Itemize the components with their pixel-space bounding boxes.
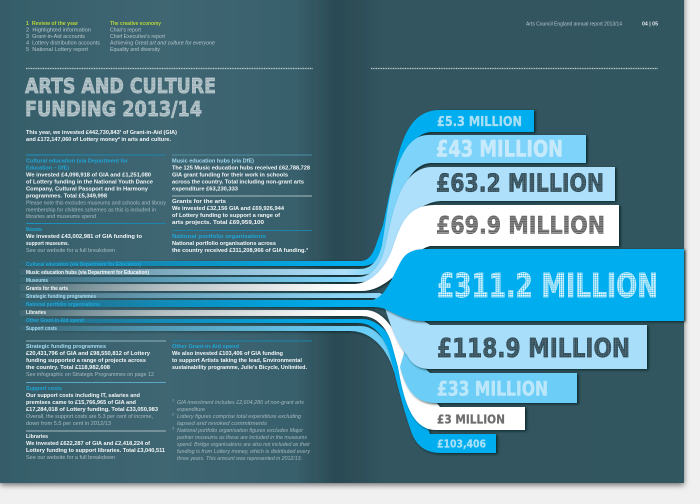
block: music education hubs: Music education hubs (via DfE) (172, 158, 254, 164)
block: support costs: £17,284,018 of Lottery funding. Total £33,050,983 (26, 407, 158, 413)
block: other grant-in-aid spend: We also invested £103,406 of GIA funding (172, 351, 284, 357)
block: cultural education: membership for children schemes as this is included in (26, 208, 156, 214)
ribbon: music education hubs, £63.2 million (20, 167, 615, 282)
navigation: chapter list (110, 21, 215, 53)
block: cultural education: Education – DfE) (26, 166, 69, 172)
ribbon labels: Museums (26, 278, 48, 284)
block: cultural education (26, 154, 166, 220)
block: strategic funding programmes: £20,431,796 of GIA and £98,550,812 of Lottery (26, 351, 151, 357)
navigation: section list: 1 Review of the year (26, 21, 79, 27)
footnotes: funding is from Lottery money, which is distributed every (177, 449, 311, 455)
ribbon: strategic funding, £118.9 million (20, 293, 647, 369)
block: cultural education: of Lottery funding in the National Youth Dance (26, 180, 153, 186)
intro text (26, 129, 177, 143)
block: national portfolio organisations: National portfolio organisations (172, 234, 266, 240)
block: cultural education: Company, Cultural Passport and In Harmony (26, 186, 149, 192)
block: libraries: We invested £622,287 of GIA and £2,418,224 of (26, 441, 150, 447)
ribbon: museums, £43 million: £43 MILLION (436, 138, 563, 162)
footnotes: ² (172, 413, 175, 419)
ribbon: grants for the arts, £69.9 million (20, 205, 619, 291)
footnotes: ³ (172, 427, 175, 433)
block: cultural education: Cultural education (via Department for (26, 158, 129, 164)
ribbon labels: Music education hubs (via Department for Education) (26, 270, 149, 276)
ribbon: support costs, £33 million (400, 350, 577, 403)
block: music education hubs (172, 154, 312, 192)
block: libraries: See our website for a full breakdown (26, 455, 115, 461)
navigation: chapter list: The creative economy (110, 21, 162, 27)
block: grants for the arts: Grants for the arts (172, 199, 226, 205)
block: support costs: Support costs (26, 386, 62, 392)
ribbon: other grant-in-aid, £103,406: £103,406 (437, 438, 486, 450)
footnotes (172, 399, 311, 462)
block: other grant-in-aid spend (172, 340, 312, 371)
navigation: section list: 5 National Lottery report (26, 47, 88, 53)
navigation: section list: 3 Grant-in-Aid accounts (26, 34, 85, 40)
block: grants for the arts (172, 196, 312, 226)
navigation: section list (26, 21, 100, 53)
block: support costs (26, 382, 166, 427)
block: cultural education: Please note this excludes museums and schools and library (26, 200, 166, 206)
block: other grant-in-aid spend: to support Artists taking the lead, Environmental (172, 358, 302, 364)
block: libraries: Lottery funding to support libraries. Total £3,040,511 (26, 448, 165, 454)
block: museums: We invested £43,002,981 of GIA funding to (26, 234, 143, 240)
block: support costs: down from 5.5 per cent in 2012/13 (26, 421, 111, 427)
block: cultural education: We invested £4,098,918 of GIA and £1,251,080 (26, 172, 151, 178)
block: national portfolio organisations: National portfolio organisations across (172, 241, 276, 247)
footnotes: ¹ (172, 399, 174, 405)
block: support costs: premises came to £15,766,965 of GIA and (26, 400, 137, 406)
block: cultural education: programmes. Total £5,349,998 (26, 194, 107, 200)
block: music education hubs: GIA grant funding for their work in schools (172, 172, 288, 178)
block: national portfolio organisations: the country received £311,208,966 of GIA funding.³ (172, 247, 308, 254)
block: strategic funding programmes: Strategic funding programmes (26, 344, 106, 350)
ribbon: music education hubs, £63.2 million: £63.2 MILLION (436, 168, 604, 198)
block: grants for the arts: We invested £32,156 GIA and £69,926,944 (172, 206, 285, 212)
ribbon: strategic funding, £118.9 million: £118.9 MILLION (437, 334, 630, 364)
footnotes: Lottery figures comprise total expenditure excluding (177, 414, 302, 420)
footnotes: three years. This amount was represented in 2012/13. (177, 456, 302, 462)
navigation: chapter list: Chair's report (110, 28, 141, 34)
block: music education hubs: across the country. Total including non-grant arts (172, 180, 304, 186)
block: music education hubs: The 125 Music education hubs received £62,788,728 (172, 166, 310, 172)
block: other grant-in-aid spend: sustainability programme, Julie's Bicycle, Unlimited. (172, 365, 307, 371)
running header: 04 | 05 (642, 22, 658, 28)
ribbon: libraries, £3 million (20, 310, 525, 430)
block: strategic funding programmes: the country. Total £118,982,608 (26, 365, 110, 371)
ribbon labels: Grants for the arts (26, 286, 68, 292)
block: other grant-in-aid spend: Other Grant-in-Aid spend (172, 344, 240, 350)
navigation: chapter list: Chief Executive's report (110, 34, 165, 40)
block: strategic funding programmes (26, 340, 166, 378)
title (25, 74, 216, 121)
footnotes: expenditure (177, 407, 205, 413)
ribbon labels: Other Grant-in-Aid spend (26, 318, 84, 324)
ribbon: cultural education, £5.3 million (20, 110, 534, 266)
block: libraries (26, 430, 166, 461)
title: ARTS AND CULTURE (25, 74, 216, 98)
footnotes: lapsed and revoked commitments (177, 421, 267, 427)
block: strategic funding programmes: See infographic on Strategic Programmes on page 12 (26, 372, 154, 378)
ribbon: other grant-in-aid, £103,406 (20, 319, 496, 453)
intro text: and £172,147,060 of Lottery money² in arts and culture. (26, 136, 171, 143)
block: grants for the arts: of Lottery funding to support a range of (172, 213, 280, 219)
block: support costs: Our support costs including IT, salaries and (26, 393, 140, 399)
navigation: chapter list: Equality and diversity (110, 47, 160, 53)
ribbon labels: Support costs (26, 326, 57, 332)
running header: Arts Council England annual report 2013/14 (526, 22, 622, 28)
footnotes: partner museums as these are included in the museums (176, 435, 307, 441)
ribbon: support costs strip and curve (behind) (20, 326, 400, 372)
footnotes: National portfolio organisation figures excludes Major (177, 428, 304, 434)
footnotes: GIA investment includes £2,604,280 of non-grant arts (177, 400, 304, 406)
block: cultural education: libraries and museums spend (26, 214, 96, 220)
title: FUNDING 2013/14 (25, 97, 202, 121)
ribbon: museums, £43 million (20, 135, 586, 275)
block: national portfolio organisations (172, 230, 312, 254)
navigation: chapter list: Achieving Great art and culture for everyone (110, 40, 215, 46)
ribbon: grants for the arts, £69.9 million: £69.9 MILLION (436, 212, 605, 240)
ribbon: national portfolio organisations, £311.2 million (20, 249, 684, 321)
block: support costs: Overall, the support costs are 5.3 per cent of income, (26, 414, 153, 420)
ribbon labels: Libraries (26, 310, 46, 316)
ribbon labels: Strategic funding programmes (26, 294, 96, 300)
ribbon: support costs, £33 million: £33 MILLION (437, 378, 548, 400)
block: grants for the arts: arts projects. Total £69,959,100 (172, 220, 264, 226)
ribbon labels: National portfolio organisations (26, 302, 100, 308)
ribbon labels: Cultural education (via Department for Education) (26, 262, 141, 268)
navigation: section list: 2 Highlighted information (26, 28, 91, 34)
ribbon: cultural education, £5.3 million: £5.3 MILLION (437, 114, 522, 130)
block: strategic funding programmes: funding supported a range of projects across (26, 358, 146, 364)
footnotes: spend. Bridge organisations are also not included as their (177, 442, 311, 448)
ribbon: libraries, £3 million: £3 MILLION (437, 412, 505, 426)
block: museums: support museums. (26, 241, 69, 247)
block: museums: Museums (26, 227, 42, 233)
navigation: section list: 4 Lottery distribution accounts (26, 40, 100, 46)
block: music education hubs: expenditure £63,230,333 (172, 186, 238, 192)
block: museums (26, 223, 166, 254)
intro text: This year, we invested £442,730,843¹ of Grant-in-Aid (GIA) (26, 129, 177, 136)
ribbon labels (26, 262, 149, 332)
block: museums: See our website for a full breakdown (26, 248, 115, 254)
block: libraries: Libraries (26, 434, 48, 440)
